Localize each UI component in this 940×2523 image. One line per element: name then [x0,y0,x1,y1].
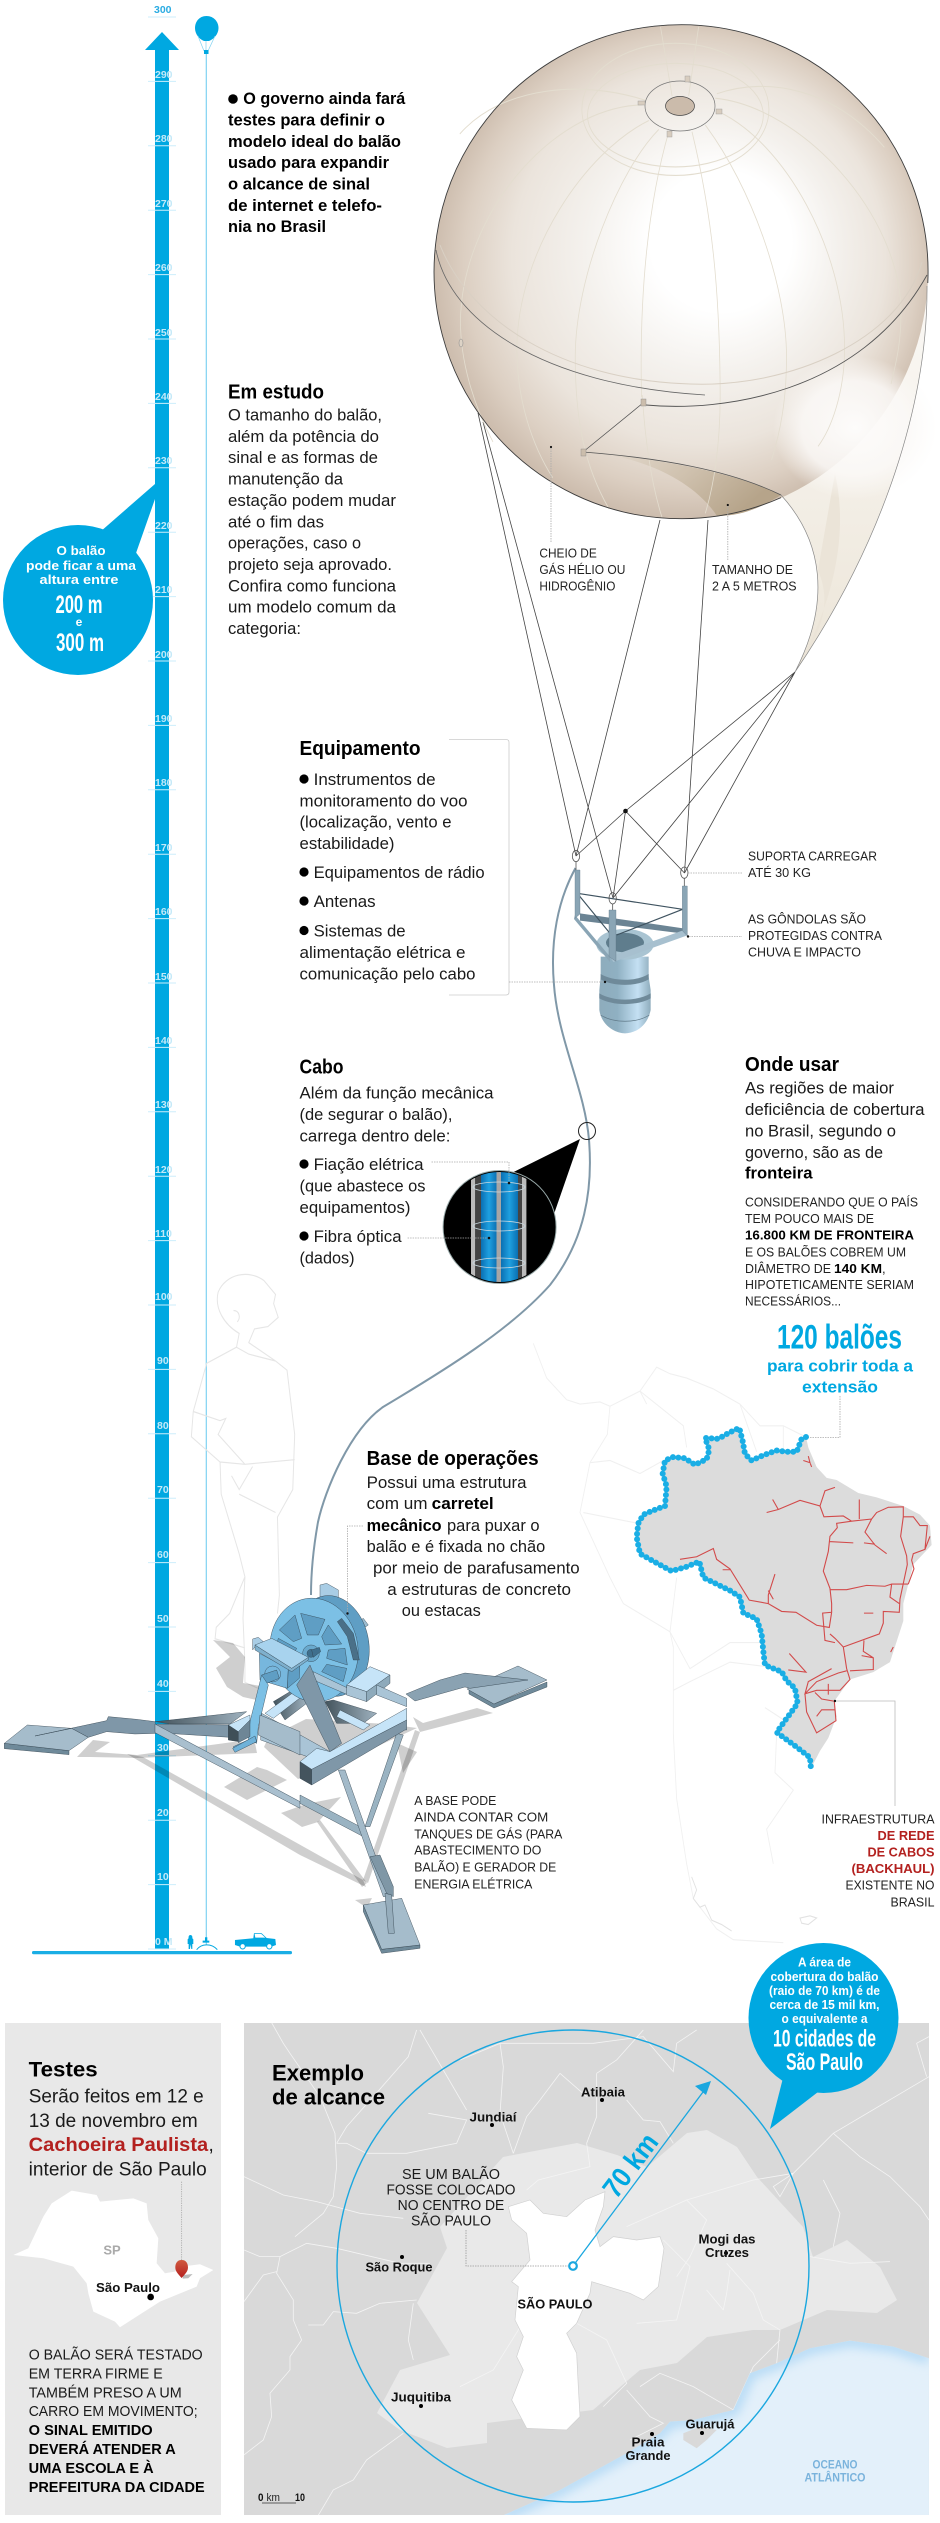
note: gas tanks: A BASE PODE [414,1793,497,1808]
balloon envelope [434,25,928,519]
city labels: Atibaia [581,2084,626,2100]
fold shadow [590,452,781,516]
city labels: Guarujá [686,2416,735,2432]
label: backhaul [822,1700,935,1910]
cable text: Cabo [300,1056,344,1078]
tests caption [29,2346,205,2496]
intro text: testes para definir o [228,110,385,130]
intro text: de internet e telefo- [228,196,382,215]
where to use text: DIÂMETRO DE [745,1261,831,1276]
main cable [311,868,590,1595]
center note: NO CENTRO DE [398,2198,505,2214]
center note: SÃO PAULO [411,2212,491,2230]
scale labels: 220 [155,520,173,532]
text: em estudo: manutenção da [228,470,344,489]
coverage circle [337,2030,809,2502]
heading: Exemplo [272,2060,364,2086]
label: backhaul: DE REDE [878,1828,935,1843]
note: gas tanks: AINDA CONTAR COM [414,1810,548,1824]
radius arrow [569,2081,711,2270]
callout: height 200 to 300 m: O balão [56,544,106,558]
cable text: Fibra óptica [314,1227,402,1246]
note: gas tanks: ENERGIA ELÉTRICA [414,1876,533,1892]
scale labels: 270 [155,198,173,210]
callout: coverage area [748,1943,898,2129]
equipment text [299,738,485,984]
where to use text: no Brasil, segundo o [745,1122,896,1140]
equator seams [440,245,922,384]
scale labels: 40 [157,1678,169,1690]
cable text [299,1056,494,1268]
callout: coverage area: São Paulo [786,2049,863,2076]
tests text: interior de São Paulo [29,2160,207,2180]
city of Sao Paulo [508,2192,664,2430]
roads [244,2023,467,2515]
base text: a estruturas de concreto [387,1580,571,1599]
callout: coverage area: (raio de 70 km) é de [769,1984,880,1998]
callout: coverage area: o equivalente a [782,2012,868,2026]
label: backhaul: DE CABOS [868,1844,935,1860]
ground line [32,1951,292,1954]
note: gas tanks: BALÃO) E GERADOR DE [414,1860,557,1874]
callout: coverage area: A área de [798,1956,851,1970]
city labels: Juquitiba [391,2390,452,2404]
scale labels: 260 [155,262,173,274]
seam tensioner [583,403,781,495]
base text [367,1448,580,1620]
base text: Possui uma estrutura [367,1473,527,1492]
right beam [313,1667,407,1707]
label: backhaul: (BACKHAUL) [852,1861,934,1876]
where to use text: governo, são as de [745,1143,883,1162]
callout: height 200 to 300 m [3,484,155,675]
where to use text: HIPOTETICAMENTE SERIAM [745,1277,914,1292]
label: backhaul: INFRAESTRUTURA [822,1812,935,1826]
intro text: usado para expandir [228,153,389,172]
note: gas tanks: ABASTECIMENTO DO [414,1842,541,1858]
suspension cables [478,413,795,898]
where to use text: TEM POUCO MAIS DE [745,1211,874,1226]
equipment text: comunicação pelo cabo [300,964,476,984]
label: load [688,848,877,880]
reel [263,1591,376,1708]
tests heading: Testes [29,2058,98,2082]
scale labels: 0 M [155,1936,173,1948]
equipment text: Instrumentos de [314,770,436,789]
scale labels: 50 [157,1613,169,1625]
callout: height 200 to 300 m: pode ficar a uma [26,559,137,573]
center note: SE UM BALÃO [402,2166,500,2183]
equipment text: Antenas [314,892,376,911]
motor box [233,1637,321,1752]
callout: height 200 to 300 m: 200 m [56,591,102,619]
balloon tail [781,286,927,672]
where to use text: NECESSÁRIOS... [745,1294,841,1308]
base text: carretel [432,1494,494,1513]
callout: height 200 to 300 m: e [76,615,83,629]
city labels: Jundiaí [470,2110,517,2124]
city labels: ATLÂNTICO [804,2470,866,2484]
rings [572,850,688,910]
scale bar: km [266,2492,280,2504]
heading [272,2060,385,2110]
scale labels: 20 [157,1807,169,1819]
city labels: Cruzes [705,2245,749,2260]
label: gas: CHEIO DE [539,546,597,560]
equipment bracket [449,740,606,995]
scale labels: 200 [155,649,173,661]
label: backhaul: EXISTENTE NO [846,1878,934,1892]
heading: de alcance [272,2084,385,2110]
border dots [637,1428,811,1768]
tests caption: EM TERRA FIRME E [29,2366,163,2382]
tests caption: PREFEITURA DA CIDADE [29,2480,205,2496]
intro text: modelo ideal do balão [228,132,401,151]
text: em estudo: Confira como funciona [228,576,397,595]
cable text: (dados) [300,1248,354,1268]
scale labels: 250 [155,327,173,339]
callout: coverage area: cobertura do balão [770,1970,879,1984]
label: gondolas [687,911,882,960]
where to use text: 16.800 KM DE FRONTEIRA [745,1228,915,1243]
scale labels: 100 [155,1291,173,1303]
cylinder [596,929,654,1033]
where to use text: CONSIDERANDO QUE O PAÍS [745,1194,918,1210]
height scale [32,4,292,1954]
text: em estudo: projeto seja aprovado. [228,555,392,574]
scale labels: 90 [157,1355,169,1367]
tests caption: DEVERÁ ATENDER A [29,2441,176,2458]
label: gas: HIDROGÊNIO [539,578,615,594]
base text: ou estacas [402,1601,481,1620]
cable text: (que abastece os [300,1176,426,1196]
where to use text: Onde usar [745,1054,839,1076]
text: em estudo: O tamanho do balão, [228,406,382,424]
where to use text: As regiões de maior [745,1078,894,1098]
scale labels: 190 [155,713,173,725]
where to use text: fronteira [745,1164,813,1182]
scale labels: 170 [155,842,173,854]
where to use text: deficiência de cobertura [745,1100,925,1119]
equipment text: Sistemas de [314,922,406,940]
operations base [4,1583,547,1953]
text: em estudo: Em estudo [228,382,324,404]
figure: 120 balloons [767,1319,914,1439]
metropolitan region [377,2130,897,2448]
tests text [29,2086,214,2180]
scale ticks [148,17,176,1949]
city labels: Grande [626,2448,670,2463]
tests text: Cachoeira Paulista [29,2135,209,2156]
label: gas [539,446,625,594]
callout: coverage area: 10 cidades de [773,2026,876,2053]
where to use text: 140 KM [834,1261,882,1276]
tests caption: UMA ESCOLA E À [29,2460,154,2477]
tests caption: O BALÃO SERÁ TESTADO [29,2346,203,2364]
scale labels: 230 [155,455,173,467]
base text: balão e é fixada no chão [367,1537,545,1556]
where to use text [745,1054,925,1308]
callout: coverage area: cerca de 15 mil km, [770,1998,880,2012]
label: size [712,504,797,594]
blue column arrow [145,32,179,1949]
label: gondolas: CHUVA E IMPACTO [748,944,861,960]
text: em estudo: categoria: [228,619,301,638]
intro text: O governo ainda fará [243,89,406,108]
callout: height 200 to 300 m: altura entre [40,573,119,587]
scale labels: 160 [155,906,173,918]
base text: para puxar o [447,1516,540,1535]
cable text: equipamentos) [300,1198,410,1217]
frame and reel [233,1583,407,1785]
scale labels: 110 [155,1228,172,1240]
where to use text: , [882,1261,886,1276]
left arm and foot [4,1712,300,1808]
scale labels [154,4,173,1948]
label: gas: GÁS HÉLIO OU [539,562,625,577]
map: Brazil [533,1343,932,1943]
note: gas tanks [414,1793,563,1892]
scale labels: 30 [157,1742,169,1754]
balloon line [205,50,207,1945]
outline [434,25,928,519]
label: load: SUPORTA CARREGAR [748,848,877,864]
balloon illustration [434,25,937,672]
icon: location pin [175,2260,188,2278]
icon: person, base and car [188,1933,276,1950]
figure: 120 balloons: para cobrir toda a [767,1358,914,1376]
scale bar [258,2492,305,2504]
scale labels: 60 [157,1549,169,1561]
panel: tests [5,2023,221,2515]
map: Sao Paulo state [13,2182,213,2327]
Brazil territory [637,1428,932,1768]
note: gas tanks: TANQUES DE GÁS (PARA [414,1826,563,1842]
scale labels: 280 [155,133,173,145]
text: em estudo: estação podem mudar [228,491,396,510]
cable text: Além da função mecânica [300,1084,494,1102]
intro text: o alcance de sinal [228,174,370,194]
scale bar: 10 [295,2492,305,2504]
diagonal strut [297,1665,342,1752]
equipment text: estabilidade) [300,834,394,853]
scale labels: 150 [155,971,173,983]
gondola [572,850,688,1033]
city labels: SÃO PAULO [518,2296,592,2312]
icon: small balloon [195,16,218,54]
reel leader [346,1526,363,1615]
center note [386,2166,568,2266]
left box end [228,1715,300,1755]
text: em estudo: sinal e as formas de [228,448,378,467]
big beam [300,1708,407,1785]
scale labels: 290 [155,69,173,81]
cable text: Fiação elétrica [314,1155,424,1174]
lower legs and right foot [300,1666,547,1953]
man silhouette [191,1274,295,1689]
frame [261,1583,377,1760]
city labels: São Roque [366,2260,432,2274]
scale bar: 0 [258,2492,264,2504]
scale labels: 130 [155,1099,173,1111]
top valve [638,76,722,137]
scale labels: 180 [155,777,173,789]
text: em estudo [228,382,397,638]
equipment text: Equipamentos de rádio [314,863,485,882]
equipment text: monitoramento do voo [300,792,468,810]
scale labels: 210 [155,584,173,596]
intro text [228,89,406,236]
city labels: Mogi das [698,2232,756,2246]
tests text: Serão feitos em 12 e [29,2086,204,2108]
cable text: (de segurar o balão), [300,1105,452,1124]
ocean [503,2341,929,2515]
center note: FOSSE COLOCADO [386,2182,516,2198]
cable text: carrega dentro dele: [300,1126,450,1146]
tests text: 13 de novembro em [29,2111,198,2132]
panel: range example [244,2023,929,2515]
scale labels: 10 [157,1871,169,1883]
equipment text: Equipamento [300,738,420,760]
intro text: nia no Brasil [228,217,326,236]
city labels: OCEANO [812,2458,858,2472]
city labels [366,2084,866,2484]
label: size: 2 A 5 METROS [712,578,797,594]
text: em estudo: operações, caso o [228,534,361,553]
scale labels: 70 [157,1484,169,1496]
label: backhaul: BRASIL [890,1894,934,1910]
equipment text: alimentação elétrica e [300,943,466,962]
label: load: ATÉ 30 KG [748,865,811,880]
scale labels: 300 [154,4,172,16]
panel: tests: São Paulo [96,2280,160,2295]
tests caption: TAMBÉM PRESO A UM [29,2384,182,2402]
text: em estudo: um modelo comum da [228,598,397,617]
ground shadows [77,1640,493,1908]
tests caption: O SINAL EMITIDO [29,2423,153,2439]
equipment text: (localização, vento e [300,812,452,832]
base text: com um [367,1494,428,1513]
seams [460,27,901,518]
tests text: , [208,2135,214,2156]
callout: height 200 to 300 m: 300 m [56,629,104,657]
backhaul network [680,1456,930,1733]
panel: tests: SP [103,2242,121,2258]
scale labels: 240 [155,391,173,403]
label: size: TAMANHO DE [712,562,793,577]
scale labels: 120 [155,1164,173,1176]
figure: 120 balloons: extensão [802,1378,878,1396]
text: em estudo: além da potência do [228,427,379,446]
frame [574,870,687,962]
cable magnifier [408,1122,596,1290]
tests caption: CARRO EM MOVIMENTO; [29,2404,198,2420]
base text: mecânico [367,1516,442,1535]
base text: Base de operações [367,1448,539,1470]
label: gondolas: AS GÔNDOLAS SÃO [748,911,866,926]
scale labels: 80 [157,1420,169,1432]
South America outline [533,1343,817,1943]
scale labels: 140 [155,1035,173,1047]
where to use text: E OS BALÕES COBREM UM [745,1244,906,1259]
radius arrow: 70 km [596,2127,664,2203]
label: gondolas: PROTEGIDAS CONTRA [748,928,882,943]
text: em estudo: até o fim das [228,512,324,531]
city labels: Praia [632,2434,665,2450]
base text: por meio de parafusamento [373,1559,580,1578]
